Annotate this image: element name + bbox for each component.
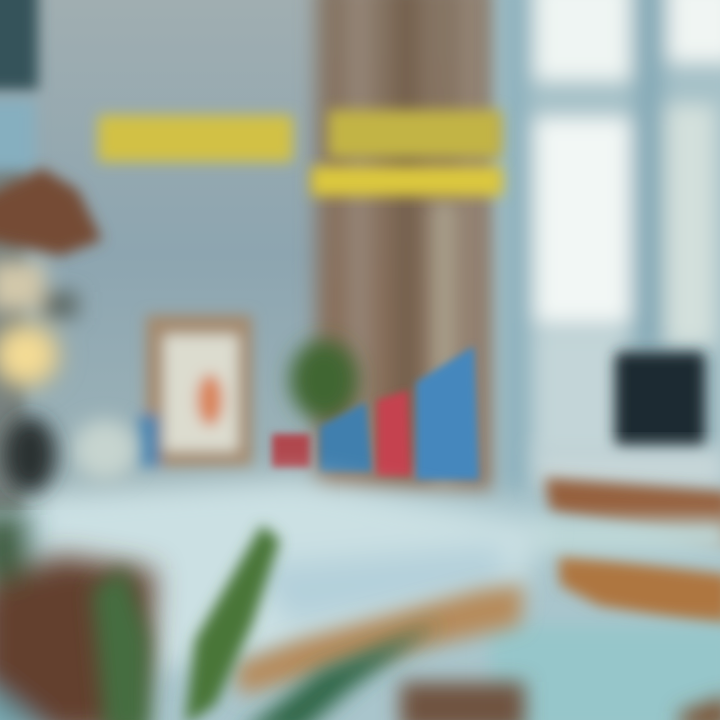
dark top-left corner <box>0 0 38 510</box>
lamp shade <box>0 168 102 256</box>
lamp base <box>4 417 56 493</box>
lamp glow <box>0 262 78 397</box>
bed <box>30 478 545 670</box>
foreground leaf right <box>240 622 440 720</box>
wood bed frame <box>235 585 720 720</box>
monitor <box>615 352 705 450</box>
bar chart <box>272 346 479 480</box>
yellow heading: left word <box>98 115 293 162</box>
foreground leaf centre <box>185 525 280 720</box>
foreground dark furniture <box>0 515 155 720</box>
bar 3 red <box>377 390 411 476</box>
pillow <box>73 420 137 480</box>
desk surface <box>535 448 720 488</box>
wooden shelf lower <box>558 553 720 628</box>
curtain <box>316 0 496 490</box>
foreground leaf left <box>92 565 150 720</box>
window <box>498 0 720 500</box>
picture frame <box>138 315 252 467</box>
wall <box>0 0 340 510</box>
floor <box>490 520 720 720</box>
wooden shelf upper <box>545 478 720 545</box>
yellow heading: right word <box>328 110 502 158</box>
bar 4 blue <box>416 346 479 480</box>
yellow heading: second line <box>311 166 503 196</box>
bar 1 red <box>272 434 310 468</box>
plant on shelf <box>290 340 358 420</box>
bar 2 blue <box>320 402 372 472</box>
